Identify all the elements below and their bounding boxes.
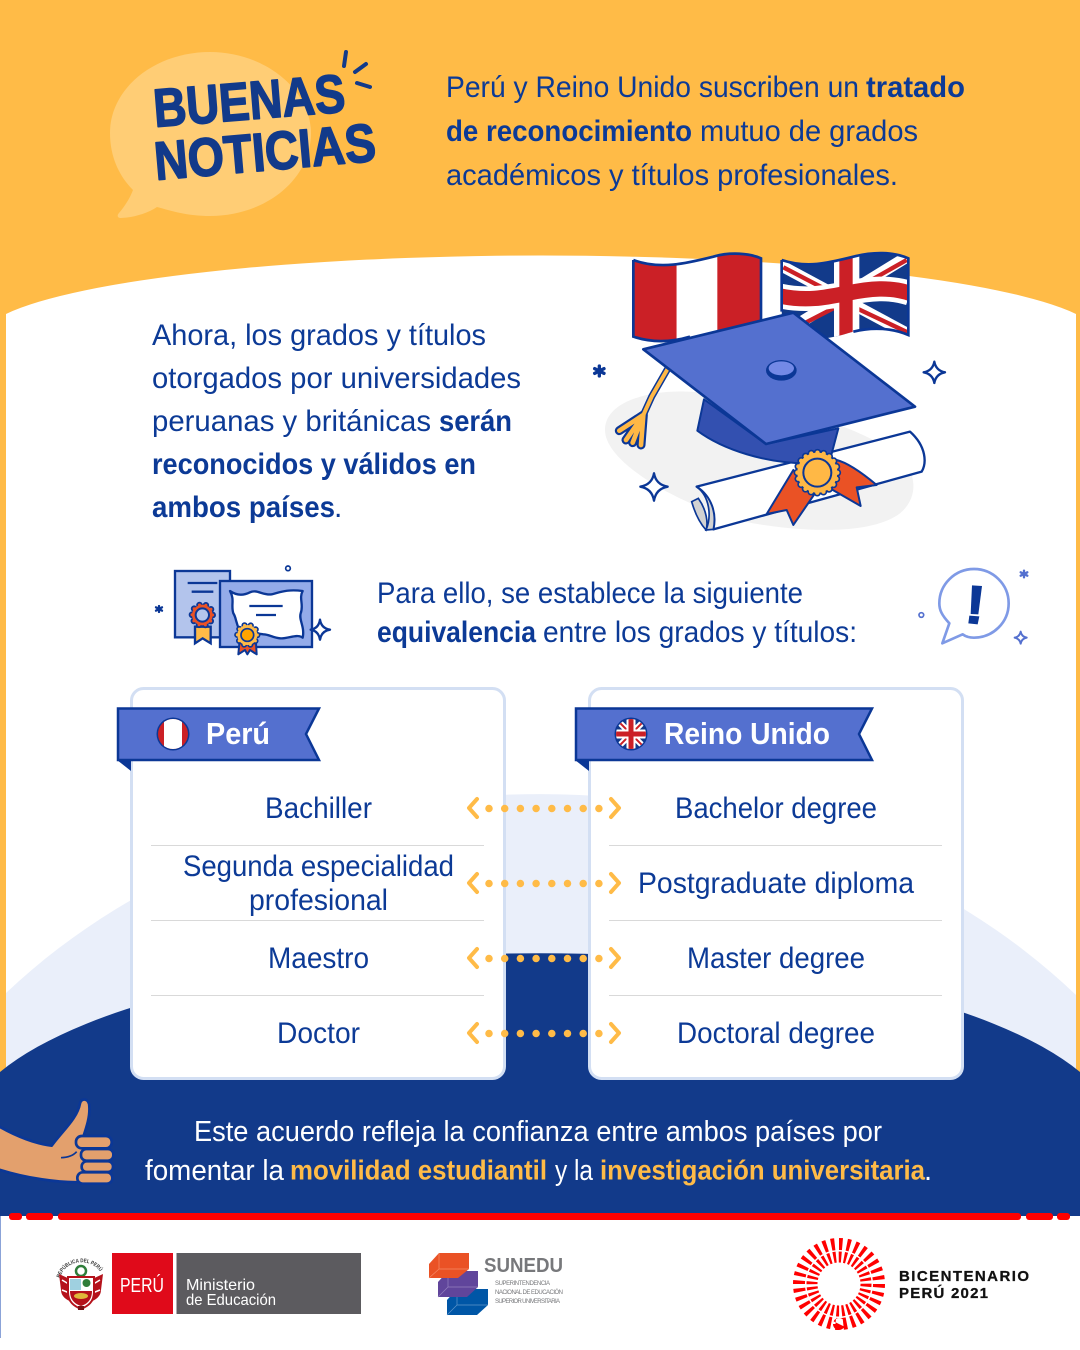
arrow: Doctor to Doctoral degree [469, 1024, 619, 1042]
cap base [697, 399, 838, 463]
sparkles [640, 362, 945, 501]
footer left edge line [0, 1216, 1, 1338]
closing message: fomentar la [145, 1155, 285, 1187]
coat of arms: REPÚBLICA DEL PERÚ [56, 1258, 104, 1278]
panel: Reino Unido [575, 688, 962, 1078]
diploma [692, 432, 925, 530]
paragraph: recognition: ambos países [152, 491, 335, 524]
Peru flag [633, 254, 761, 341]
logo: Bicentenario Perú 2021: PERÚ 2021 [899, 1284, 988, 1302]
row: Bachelor degree: Bachelor degree [675, 792, 877, 825]
icon: sparks [344, 52, 370, 87]
logo: Ministerio de Educación [56, 1253, 361, 1314]
title: Buenas Noticias [151, 64, 378, 192]
logo: SUNEDU: SUPERIOR UNIVERSITARIA [495, 1299, 560, 1305]
logo: Bicentenario Perú 2021 [799, 1244, 1029, 1324]
logo: Ministerio de Educación: de Educación [186, 1292, 276, 1309]
paragraph: recognition: serán [439, 405, 512, 438]
ribbon header: Perú [117, 708, 319, 771]
logo: SUNEDU: SUNEDU [484, 1255, 563, 1277]
row: Postgraduate diploma: Postgraduate diploma [638, 867, 914, 900]
paragraph: equivalence: Para ello, se establece la siguiente [377, 577, 803, 610]
closing message: movilidad estudiantil [290, 1154, 547, 1186]
paragraph: equivalence: entre los grados y títulos: [543, 616, 857, 649]
icon: thumbs up [0, 1100, 113, 1184]
red dashed band [9, 1213, 1070, 1220]
arrow: Bachiller to Bachelor degree [469, 799, 619, 817]
title: Buenas Noticias: NOTICIAS [152, 113, 378, 192]
paragraph: recognition: reconocidos y válidos en [152, 448, 476, 481]
intro paragraph: mutuo de grados [700, 115, 918, 148]
closing message: investigación universitaria [600, 1154, 925, 1186]
row: Segunda especialidad profesional [183, 850, 454, 917]
logo: Bicentenario Perú 2021: BICENTENARIO [899, 1268, 1029, 1285]
paragraph: recognition: otorgados por universidades [152, 362, 521, 395]
intro paragraph: Perú y Reino Unido suscriben un [446, 71, 859, 104]
closing message: . [924, 1155, 932, 1187]
row: Segunda especialidad profesional: Segunda especialidad [183, 850, 454, 883]
arrow: Segunda especialidad to Postgraduate diploma [469, 874, 619, 892]
icon: certificates [156, 566, 330, 654]
intro paragraph: académicos y títulos profesionales. [446, 159, 898, 192]
closing message: y la [555, 1155, 594, 1187]
ribbon header: Reino Unido [575, 708, 872, 771]
logo: Ministerio de Educación: Ministerio [186, 1277, 255, 1294]
stacked blocks [429, 1253, 488, 1315]
footer background [0, 1216, 1080, 1350]
asterisk [595, 366, 604, 376]
row: Segunda especialidad profesional: profesional [249, 884, 388, 917]
panel: Perú [117, 688, 504, 1078]
logo: SUNEDU: SUPERINTENDENCIA [495, 1281, 550, 1287]
cap button [766, 360, 797, 381]
ribbon header: Perú: Perú [206, 716, 270, 751]
intro paragraph [446, 71, 965, 192]
speech bubble [110, 52, 311, 218]
paragraph: equivalence: equivalencia [377, 616, 536, 649]
background: navy hill [0, 953, 1080, 1216]
row: Doctoral degree: Doctoral degree [677, 1017, 875, 1050]
logo: SUNEDU: NACIONAL DE EDUCACIÓN [495, 1289, 563, 1296]
paragraph: recognition: . [334, 491, 342, 524]
seal [797, 453, 837, 493]
row: Bachiller: Bachiller [265, 792, 372, 825]
paragraph: recognition: peruanas y británicas [152, 405, 431, 438]
radial sun mark [799, 1244, 879, 1324]
tassel [619, 369, 667, 445]
row: Doctor: Doctor [277, 1017, 360, 1050]
background: light blue hill [6, 794, 1076, 1080]
UK flag [780, 252, 910, 338]
logo: SUNEDU [429, 1253, 563, 1315]
paragraph: recognition [152, 319, 521, 524]
paragraph: recognition: Ahora, los grados y títulos [152, 319, 486, 352]
row: Maestro: Maestro [268, 942, 369, 975]
grey blob [605, 391, 913, 530]
logo: Ministerio de Educación: PERÚ [120, 1274, 164, 1297]
cap top [643, 313, 915, 444]
title: Buenas Noticias: BUENAS [151, 64, 347, 139]
ribbon header: Reino Unido: Reino Unido [664, 716, 830, 751]
intro paragraph: de reconocimiento [446, 115, 692, 148]
background: white dome [6, 256, 1076, 1080]
arrow: Maestro to Master degree [469, 949, 619, 967]
closing message: Este acuerdo refleja la confianza entre ambos países por [194, 1116, 882, 1148]
intro paragraph: tratado [866, 71, 965, 104]
coat of arms [56, 1258, 104, 1310]
illustration: graduation cap, flags and diploma [595, 250, 945, 530]
paragraph: equivalence [377, 577, 857, 649]
icon: exclamation bubble [919, 569, 1027, 644]
row: Master degree: Master degree [687, 942, 865, 975]
ribbon [767, 460, 877, 525]
closing message [145, 1116, 932, 1187]
